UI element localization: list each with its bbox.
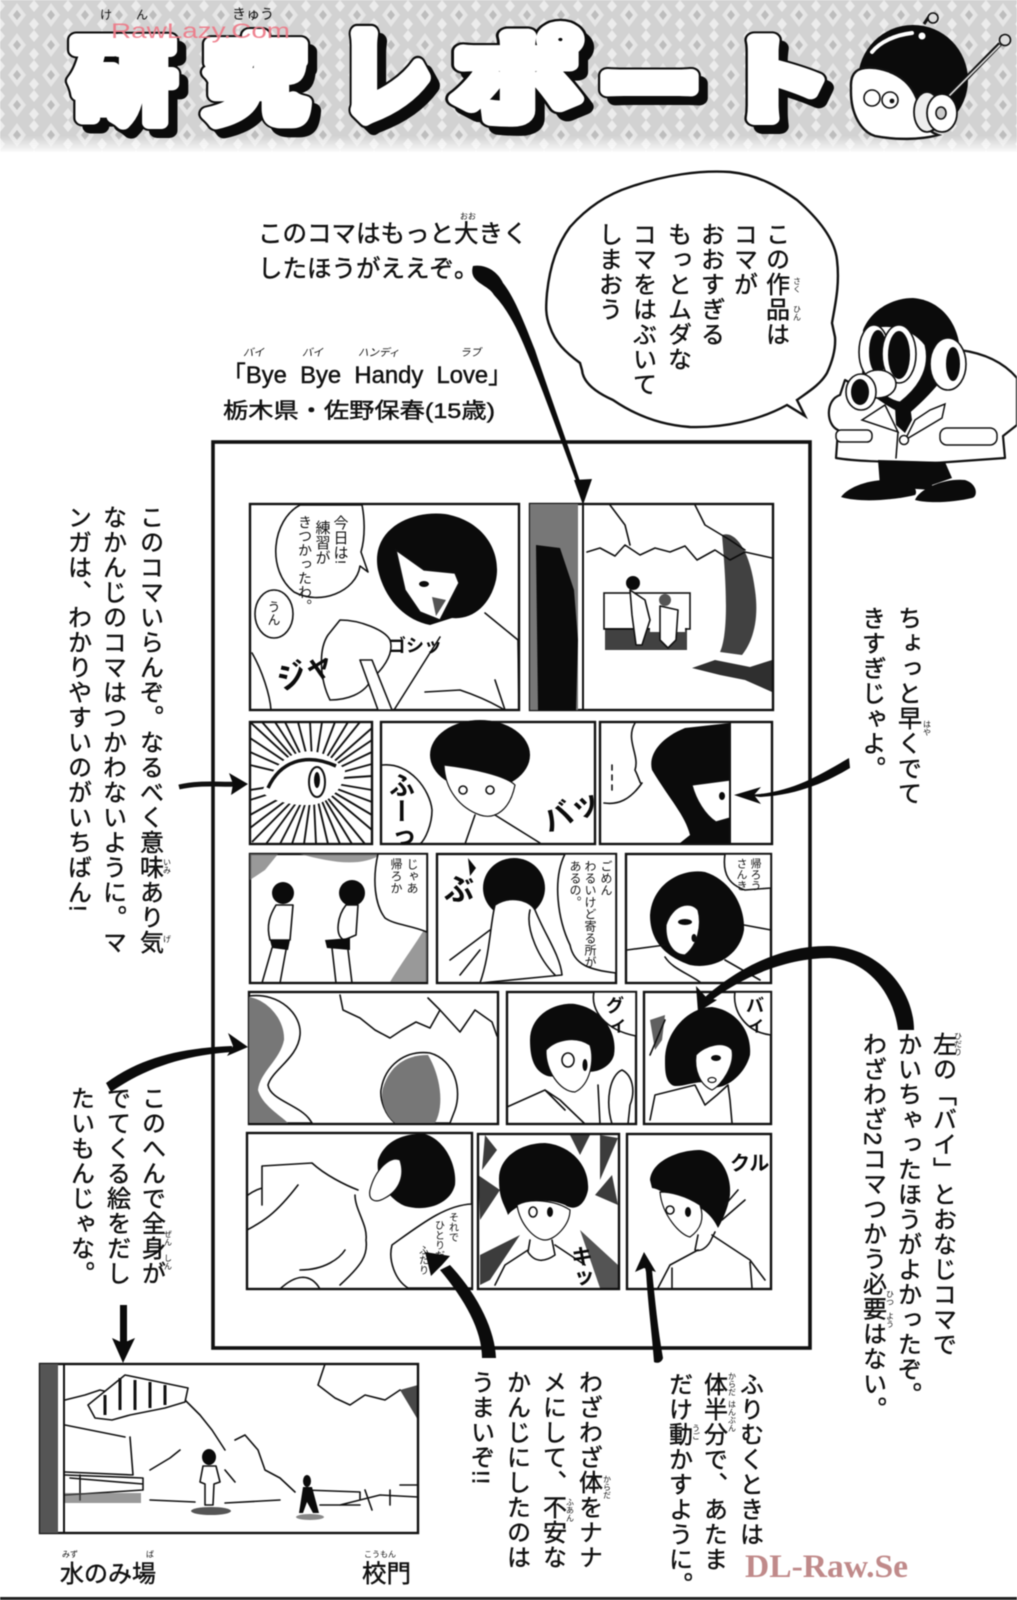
icon: helmet head mascot bbox=[851, 13, 1010, 139]
callout: このコマは caption bbox=[258, 212, 528, 283]
note: 左の「バイ」と: ひだり bbox=[954, 1032, 962, 1056]
arrow: to eye panel bbox=[179, 773, 248, 795]
legs and shoes bbox=[878, 460, 952, 490]
manga panel 2-1: eye with burst lines bbox=[250, 722, 372, 844]
note: このコマいらんぞ: げ bbox=[162, 935, 172, 943]
note: ちょっと早くでて: きすぎじゃよ。 bbox=[858, 606, 884, 781]
title ruby: けん きゅう: ん bbox=[136, 8, 148, 22]
title: 研究レポート: ポ bbox=[460, 7, 591, 151]
note: このへんで全身が: でてくる絵をだし bbox=[102, 1086, 130, 1286]
arrow: down to school panel bbox=[112, 1305, 135, 1363]
bubble text bbox=[594, 222, 802, 397]
head bbox=[862, 298, 960, 416]
author line: 栃木県・佐野保春(15歳) bbox=[223, 399, 495, 423]
manga panel 5-1: boy looking back: それで bbox=[446, 1212, 458, 1242]
bubble text: おおすぎる bbox=[696, 222, 724, 347]
note: 左の「バイ」と: 左の「バイ」とおなじコマで bbox=[928, 1032, 956, 1357]
manga panel 4-3: girl waving with バイ bbox=[644, 992, 771, 1124]
speech bubble: この作品は bbox=[546, 172, 838, 427]
manga panel 1-1: girl talking: うん bbox=[266, 600, 280, 626]
bubble text: もっとムダな bbox=[664, 222, 690, 372]
note: ふりむくときは bbox=[664, 1372, 762, 1597]
manga panel 5-1: boy looking back: ひとりだ bbox=[432, 1220, 444, 1260]
title: 研究レポート: ー bbox=[606, 21, 709, 153]
arrow: to turning panel bbox=[635, 1252, 663, 1363]
note: 左の「バイ」と: ひつ bbox=[886, 1290, 894, 1306]
note: わざわざ体をナナ: かんじにしたのは bbox=[502, 1370, 530, 1570]
pockets bbox=[836, 430, 872, 442]
manga panel 4-2: boy waving with グイ bbox=[507, 992, 636, 1124]
coat bbox=[829, 350, 1017, 463]
manga panel 3-2: boy wiping face with towel: ぶ bbox=[444, 865, 474, 909]
manga panel 5-1: boy looking back bbox=[247, 1133, 472, 1289]
label: 水のみ場: ば bbox=[146, 1550, 154, 1559]
note: このコマいらんぞ: ンガは、わかりやすいのがいちばん! bbox=[64, 505, 90, 913]
manga panel 1-2: dark band, tree and bench bbox=[530, 504, 773, 710]
bubble text: ひん bbox=[792, 305, 802, 321]
note: わざわざ体をナナ: わざわざ体をナナ bbox=[574, 1370, 602, 1570]
manga panel 3-2: boy wiping face with towel bbox=[437, 854, 616, 983]
title: 研究レポート: ト bbox=[721, 5, 831, 141]
title: 研究レポート: ー bbox=[598, 13, 701, 145]
manga panel 1-1: girl talking: ジャ bbox=[269, 638, 339, 699]
title: 研究レポート bbox=[72, 0, 839, 153]
callout: このコマは caption: おお bbox=[460, 212, 476, 221]
manga panel 4-2: boy waving with グイ: イ bbox=[610, 1013, 626, 1037]
note: 左の「バイ」と: わざわざ2コマつかう必要はない。 bbox=[858, 1032, 886, 1421]
manga panel 1-1: girl talking: 今日は! bbox=[332, 515, 348, 564]
note: このへんで全身が: ぜん bbox=[164, 1230, 172, 1246]
manga panel 3-2: boy wiping face with towel: あるの。 bbox=[568, 860, 582, 908]
bubble text: さく bbox=[792, 277, 802, 293]
title ruby: けん きゅう bbox=[100, 6, 274, 22]
note: ふりむくときは: うご bbox=[692, 1424, 700, 1440]
title: 研究レポート: 研 bbox=[80, 17, 183, 149]
manga panel 4-3: girl waving with バイ: イ bbox=[748, 1013, 764, 1037]
manga panel 2-3: face cut off at strip bbox=[600, 722, 772, 844]
title: 研究レポート: ー bbox=[598, 13, 701, 145]
note: このコマいらんぞ: なかんじのコマはつかわないように。マ bbox=[98, 505, 126, 955]
note: このへんで全身が: このへんで全身が bbox=[138, 1086, 166, 1286]
label: 校門: こうもん bbox=[364, 1550, 396, 1559]
note: ふりむくときは: ふりむくときは bbox=[736, 1372, 762, 1547]
manga panel 3-1: two figures walking: 帰ろか bbox=[389, 858, 403, 894]
main frame bbox=[213, 442, 810, 1348]
manga panel 3-2: boy wiping face with towel: ごめん bbox=[599, 860, 613, 896]
manga panel 4-3: girl waving with バイ: バ bbox=[746, 992, 764, 1018]
note: このコマいらんぞ: このコマいらんぞ。なるべく意味あり気 bbox=[136, 505, 164, 955]
arrow: to face strip bbox=[734, 758, 850, 804]
manga panel 1-1: girl talking bbox=[250, 504, 519, 710]
book title: Bye Bye Handy Love bbox=[222, 347, 512, 389]
note: ちょっと早くでて: はや bbox=[922, 720, 932, 736]
callout: このコマは caption: このコマはもっと大きく bbox=[258, 220, 528, 248]
face bbox=[866, 326, 926, 402]
header band: patterned background bbox=[0, 0, 1017, 154]
label: 水のみ場 bbox=[60, 1549, 156, 1588]
bubble text: この作品は bbox=[762, 222, 790, 347]
callout: このコマは caption: したほうがええぞ。 bbox=[258, 255, 478, 283]
note: ふりむくときは: からだ bbox=[728, 1372, 736, 1396]
bottom edge line bbox=[0, 1597, 1017, 1600]
manga panel 5-2: boy front with speed lines bbox=[478, 1134, 619, 1289]
manga panel 3-1: two figures walking bbox=[250, 854, 427, 983]
title: 研究レポート: ト bbox=[729, 13, 839, 149]
title: 研究レポート: 究 bbox=[204, 9, 307, 141]
manga panel 3-3: girl profile bbox=[626, 854, 771, 983]
note: わざわざ体をナナ: ふあん bbox=[566, 1498, 574, 1522]
manga panel 4-2: boy waving with グイ: グ bbox=[606, 992, 624, 1018]
note: わざわざ体をナナ: からだ bbox=[602, 1475, 612, 1499]
watermark: DL-Raw.Se: DL-Raw.Se bbox=[745, 1549, 908, 1585]
note: ふりむくときは: だけ動かすように。 bbox=[664, 1372, 692, 1597]
manga panel 3-3: girl profile: さんき bbox=[735, 858, 748, 891]
note: わざわざ体をナナ: うまいぞ!! bbox=[466, 1370, 494, 1485]
title: 研究レポート: ト bbox=[721, 5, 831, 141]
note: わざわざ体をナナ: メにして、不安な bbox=[538, 1370, 566, 1570]
bubble text: しまおう bbox=[594, 222, 622, 322]
note: 左の「バイ」と: よう bbox=[886, 1312, 894, 1328]
book title: Bye Bye Handy Love: ラブ bbox=[460, 347, 483, 359]
label: 水のみ場: みず bbox=[62, 1549, 78, 1559]
manga panel 4-1: landscape with heads from behind bbox=[249, 992, 498, 1124]
title: 研究レポート: レ bbox=[347, 0, 439, 153]
note: このへんで全身が: たいもんじゃな。 bbox=[66, 1086, 94, 1286]
character: doctor with goggles bbox=[829, 298, 1017, 502]
watermark: RawLazy.Com: RawLazy.Com bbox=[111, 20, 290, 43]
title: 研究レポート: 究 bbox=[212, 17, 315, 149]
arrow: caption to panel bbox=[472, 266, 592, 505]
manga panel 1-1: girl talking: ゴシッ bbox=[388, 632, 442, 658]
note: ふりむくときは: 体半分で、あたま bbox=[700, 1372, 728, 1572]
manga panel 3-2: boy wiping face with towel: わるいけど寄る所が bbox=[583, 860, 597, 968]
note: このコマいらんぞ bbox=[64, 505, 172, 955]
manga panel 5-3: girl turning with クル: クル bbox=[730, 1147, 769, 1176]
note: ちょっと早くでて: ちょっと早くでて bbox=[894, 606, 920, 806]
manga panel 5-2: boy front with speed lines: キッ bbox=[566, 1245, 598, 1289]
arrow: big curve to バイ panel bbox=[696, 946, 914, 1030]
manga panel: school yard bbox=[40, 1364, 418, 1533]
manga panel 2-2: boy sighing bbox=[381, 720, 607, 850]
manga panel 2-2: boy sighing: ふーっ bbox=[384, 772, 420, 850]
title ruby: けん きゅう: け bbox=[100, 8, 112, 22]
manga panel 3-1: two figures walking: じゃあ bbox=[405, 858, 419, 894]
manga panel 3-3: girl profile: 帰ろう bbox=[749, 858, 762, 891]
note: このへんで全身が bbox=[66, 1086, 172, 1286]
manga panel 2-2: boy sighing: バッ bbox=[534, 776, 607, 841]
note: 左の「バイ」と bbox=[858, 1032, 962, 1421]
note: このへんで全身が: しん bbox=[164, 1254, 172, 1270]
bubble text: コマをはぶいて bbox=[628, 222, 656, 397]
manga panel 1-1: girl talking: 練習が bbox=[314, 520, 330, 565]
manga panel 5-1: boy looking back: ふたり bbox=[416, 1245, 428, 1275]
manga panel 5-3: girl turning with クル bbox=[627, 1134, 771, 1289]
title: 研究レポート: 究 bbox=[204, 9, 307, 141]
manga panel 1-1: girl talking: きつかったわ。 bbox=[297, 515, 313, 613]
title: 研究レポート: 研 bbox=[72, 9, 175, 141]
bubble text: コマが bbox=[730, 222, 756, 297]
goggle lenses bbox=[859, 325, 889, 379]
note: わざわざ体をナナ bbox=[466, 1370, 612, 1570]
title ruby: けん きゅう: きゅう bbox=[232, 6, 274, 22]
arrow: to bubble panel bbox=[425, 1252, 496, 1358]
note: ふりむくときは: はんぶん bbox=[728, 1400, 736, 1432]
book title: Bye Bye Handy Love: ハンディ bbox=[358, 347, 399, 359]
title: 研究レポート: ポ bbox=[452, 0, 583, 143]
label: 水のみ場: 水のみ場 bbox=[60, 1561, 156, 1588]
note: ちょっと早くでて bbox=[858, 606, 932, 806]
arrow: to landscape panel bbox=[106, 1033, 248, 1092]
tie and collar bbox=[895, 405, 912, 433]
title: 研究レポート: 研 bbox=[72, 9, 175, 141]
note: 左の「バイ」と: かいちゃったほうがよかったぞ。 bbox=[894, 1032, 920, 1407]
book title: Bye Bye Handy Love: バイ bbox=[243, 347, 264, 359]
book title: Bye Bye Handy Love: 「Bye Bye Handy Love」 bbox=[222, 362, 512, 389]
title: 研究レポート: ポ bbox=[452, 0, 583, 143]
note: このコマいらんぞ: いみ bbox=[162, 858, 172, 874]
label: 校門: 校門 bbox=[362, 1560, 411, 1588]
book title: Bye Bye Handy Love: バイ bbox=[302, 347, 323, 359]
